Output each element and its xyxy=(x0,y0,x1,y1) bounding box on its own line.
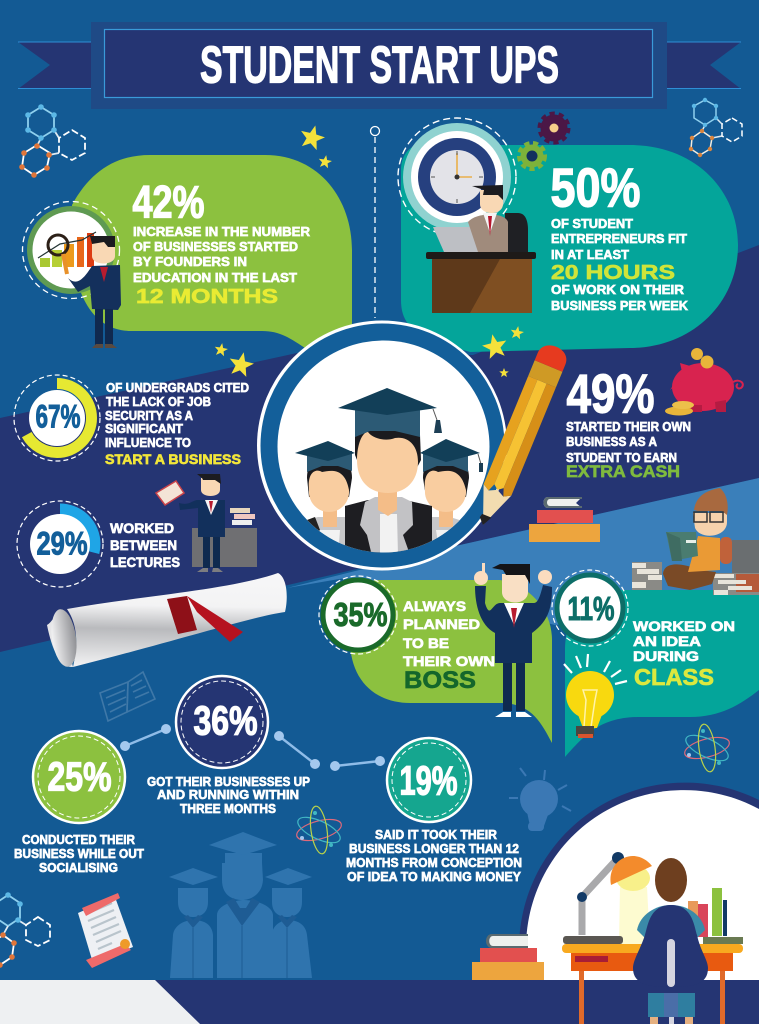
dashed center line xyxy=(370,126,380,318)
text: of student entrepreneurs: ENTREPRENEURS FIT xyxy=(551,232,687,246)
icon: atom right xyxy=(682,723,732,773)
teal bubble xyxy=(401,145,738,352)
icon: light bulb xyxy=(564,654,627,738)
text: said it took: OF IDEA TO MAKING MONEY xyxy=(347,870,522,884)
text: increase: 12 MONTHS xyxy=(136,286,278,308)
icon: man at desk xyxy=(426,185,536,313)
icon: bottom book stack xyxy=(472,934,544,980)
central circle: graduates xyxy=(257,320,507,570)
books on desk xyxy=(688,888,743,944)
green bubble xyxy=(350,580,552,743)
text: increase: OF BUSINESSES STARTED xyxy=(133,240,298,254)
panel: 36 percent xyxy=(147,676,310,816)
dome background xyxy=(519,783,759,980)
icon: lecturer at desk xyxy=(156,474,257,572)
panel: 29 percent xyxy=(17,474,257,587)
text: worked between lectures xyxy=(110,521,180,570)
text: conducted: CONDUCTED THEIR xyxy=(22,833,135,847)
panel: 42 percent xyxy=(22,155,352,350)
panel: 35 percent xyxy=(319,563,552,743)
panel: 50 percent xyxy=(398,114,738,352)
icon: diploma scroll xyxy=(47,573,287,668)
badge: 25% xyxy=(33,731,125,823)
stat: 49%: 49% xyxy=(566,362,654,424)
text: undergrads: SECURITY AS A xyxy=(105,409,193,423)
donut: 29% xyxy=(17,501,103,587)
donut: 35% xyxy=(319,576,397,654)
donut: 67%: 67% xyxy=(36,398,80,434)
icon: businessman with chart xyxy=(22,202,121,348)
left graduate xyxy=(295,441,355,556)
text: worked on an idea xyxy=(633,619,735,690)
text: undergrads: START A BUSINESS xyxy=(105,451,241,467)
text: worked between lectures: LECTURES xyxy=(110,555,180,570)
text: started their own: STARTED THEIR OWN xyxy=(566,420,691,434)
text: worked on an idea: CLASS xyxy=(634,664,714,690)
bottom band xyxy=(0,980,759,1024)
title banner xyxy=(18,22,741,109)
text: undergrads: OF UNDERGRADS CITED xyxy=(106,381,249,395)
navy diagonal band xyxy=(0,245,759,652)
stars around pencil xyxy=(213,325,525,378)
text: always planned: BOSS xyxy=(404,667,476,694)
text: got their businesses xyxy=(147,775,310,816)
title: STUDENT START UPS xyxy=(200,36,559,94)
text: undergrads: THE LACK OF JOB xyxy=(106,395,211,409)
badge: 36%: 36% xyxy=(194,698,258,744)
icon: clock xyxy=(398,118,516,236)
panel: 25 percent xyxy=(14,731,144,875)
desk lamp xyxy=(563,852,652,944)
ribbon left xyxy=(18,42,91,89)
text: conducted xyxy=(14,833,144,875)
connector lines xyxy=(120,724,385,771)
text: of student entrepreneurs: OF STUDENT xyxy=(551,217,633,231)
right graduate xyxy=(412,439,483,556)
text: conducted: BUSINESS WHILE OUT xyxy=(14,847,144,861)
donut: 11% xyxy=(552,570,628,646)
green bubble xyxy=(72,155,352,350)
ribbon right xyxy=(667,42,741,89)
text: always planned: ALWAYS xyxy=(403,599,466,614)
text: increase: INCREASE IN THE NUMBER xyxy=(133,225,310,239)
panel: 67 percent xyxy=(14,375,249,467)
donut: 67% xyxy=(14,375,100,461)
center graduate xyxy=(338,388,442,556)
text: increase: BY FOUNDERS IN xyxy=(133,255,247,269)
text: of student entrepreneurs: IN AT LEAST xyxy=(551,248,629,262)
text: always planned xyxy=(403,599,495,694)
icon: green gear xyxy=(520,144,544,168)
donut: 35%: 35% xyxy=(334,596,388,633)
text: said it took xyxy=(346,828,522,884)
badge: 19%: 19% xyxy=(400,758,458,804)
text: always planned: TO BE xyxy=(403,636,449,651)
text: undergrads xyxy=(105,381,249,467)
icon: atom center xyxy=(294,805,344,855)
text: increase xyxy=(133,225,310,308)
stat: 42%: 42% xyxy=(132,176,204,228)
teal bubble xyxy=(565,590,759,757)
donut: 11%: 11% xyxy=(568,590,614,627)
text: got their businesses: AND RUNNING WITHIN xyxy=(157,788,299,802)
ribbon xyxy=(167,596,243,642)
text: said it took: SAID IT TOOK THEIR xyxy=(375,828,497,842)
text: undergrads: INFLUENCE TO xyxy=(105,436,191,450)
bottom left white corner xyxy=(0,980,200,1024)
text: started their own: EXTRA CASH xyxy=(566,462,680,481)
lamp light xyxy=(619,887,650,944)
text: of student entrepreneurs: BUSINESS PER WEEK xyxy=(551,299,688,313)
icon: ghost open book xyxy=(100,672,155,721)
panel: 19 percent xyxy=(346,738,522,884)
text: got their businesses: THREE MONTHS xyxy=(180,802,276,816)
text: started their own xyxy=(566,420,691,481)
dome: student at desk xyxy=(519,783,759,1024)
panel: 11 percent xyxy=(552,570,759,757)
text: always planned: THEIR OWN xyxy=(403,654,495,669)
icon: student reading xyxy=(632,488,759,595)
text: worked on an idea: AN IDEA xyxy=(633,634,701,649)
text: of student entrepreneurs: 20 HOURS xyxy=(551,261,675,284)
icon: ghost bulb xyxy=(509,768,571,831)
text: of student entrepreneurs xyxy=(551,217,688,313)
text: got their businesses: GOT THEIR BUSINESSES UP xyxy=(147,775,310,789)
icon: stack of books xyxy=(529,497,600,542)
text: conducted: SOCIALISING xyxy=(39,861,118,875)
stars top xyxy=(297,122,333,169)
text: started their own: STUDENT TO EARN xyxy=(566,451,677,465)
text: undergrads: SIGNIFICANT xyxy=(105,422,183,436)
text: said it took: MONTHS FROM CONCEPTION xyxy=(346,856,522,870)
icon: certificate xyxy=(78,893,133,968)
text: increase: EDUCATION IN THE LAST xyxy=(133,271,297,285)
text: worked on an idea: WORKED ON xyxy=(633,619,735,634)
silhouette: graduates xyxy=(169,832,312,978)
icon: pencil xyxy=(469,341,570,531)
text: said it took: BUSINESS LONGER THAN 12 xyxy=(349,842,519,856)
molecule top left xyxy=(19,104,85,178)
icon: maroon gear xyxy=(540,114,568,142)
badge: 19% xyxy=(387,738,471,822)
text: worked on an idea: DURING xyxy=(633,649,699,664)
donut: 29%: 29% xyxy=(36,526,88,562)
text: of student entrepreneurs: OF WORK ON THEIR xyxy=(551,283,684,297)
stat: 50%: 50% xyxy=(550,156,640,218)
desk xyxy=(562,944,743,1024)
text: started their own: BUSINESS AS A xyxy=(566,435,657,449)
panel: 49 percent xyxy=(566,348,743,481)
student xyxy=(633,858,708,1024)
badge: 25%: 25% xyxy=(48,754,112,800)
badge: 36% xyxy=(176,676,268,768)
text: worked between lectures: BETWEEN xyxy=(110,538,177,553)
molecule top right xyxy=(689,98,742,157)
text: worked between lectures: WORKED xyxy=(110,521,174,536)
text: always planned: PLANNED xyxy=(403,617,480,632)
molecule bottom left xyxy=(0,892,50,968)
icon: man pointing up xyxy=(474,563,552,717)
icon: piggy bank xyxy=(665,348,743,416)
light blue wedge xyxy=(287,478,759,625)
